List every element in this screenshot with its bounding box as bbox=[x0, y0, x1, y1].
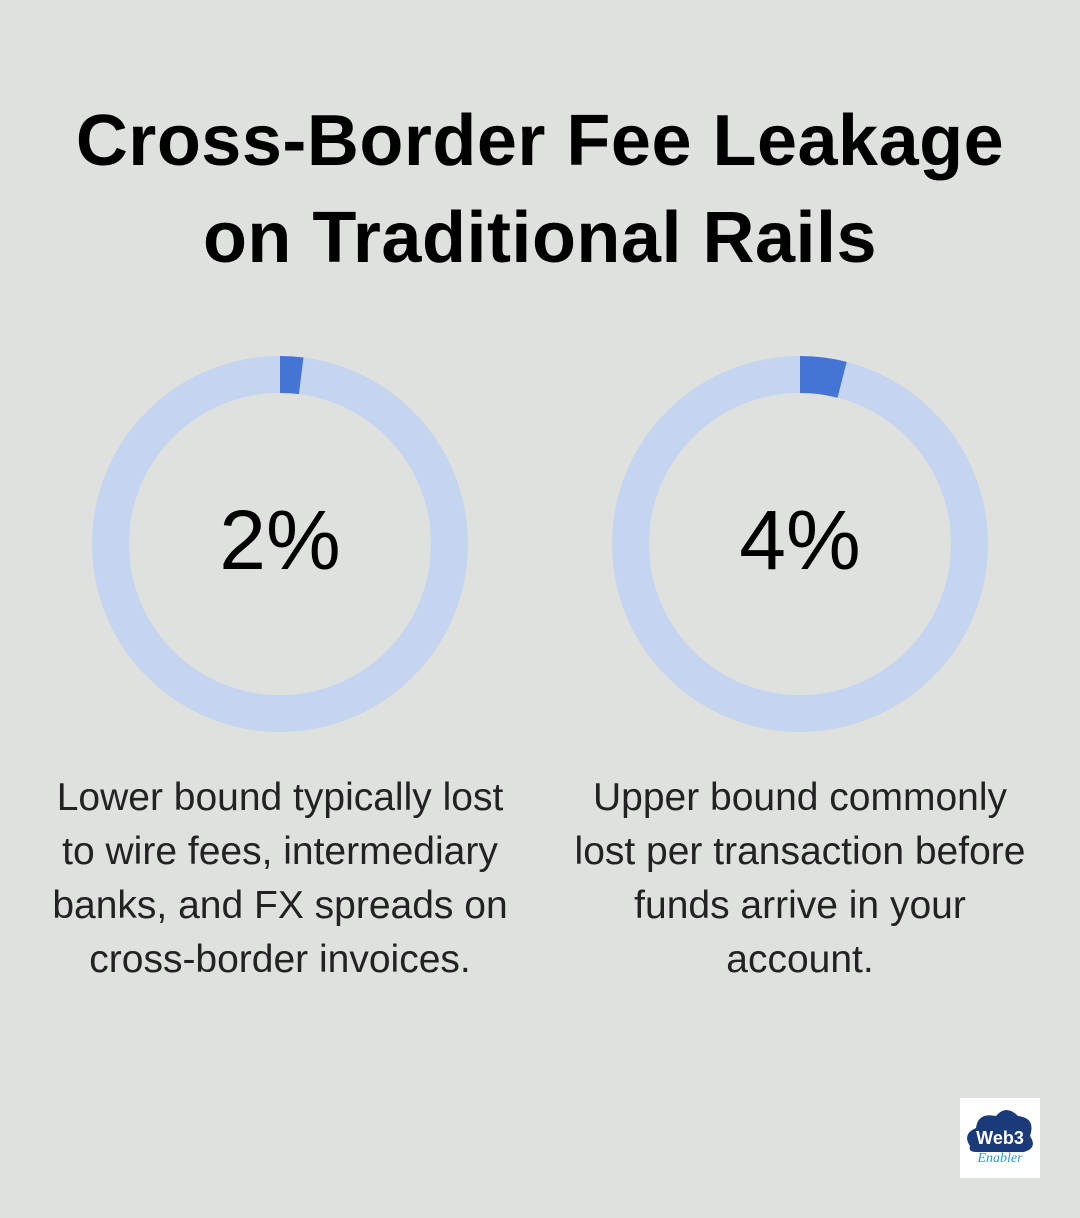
donut chart: 2% bbox=[92, 356, 468, 732]
text: upper bound bbox=[575, 776, 1025, 981]
text: lower bound: to wire fees, intermediary bbox=[62, 830, 498, 873]
donut chart: 4% bbox=[612, 356, 988, 732]
stat: 4%: 4% bbox=[739, 493, 861, 587]
title bbox=[76, 101, 1004, 278]
logo: Web3 bbox=[960, 1098, 1040, 1178]
text: lower bound bbox=[52, 776, 508, 981]
text: lower bound: Lower bound typically lost bbox=[57, 776, 503, 819]
logo: Web3: Web3 bbox=[976, 1128, 1024, 1148]
logo: Web3: Enabler bbox=[976, 1151, 1023, 1166]
title: Cross-Border Fee Leakage bbox=[76, 101, 1004, 181]
stat: 2%: 2% bbox=[219, 493, 341, 587]
text: lower bound: cross-border invoices. bbox=[89, 938, 471, 981]
text: upper bound: account. bbox=[726, 938, 874, 981]
text: upper bound: Upper bound commonly bbox=[593, 776, 1007, 819]
text: lower bound: banks, and FX spreads on bbox=[52, 884, 508, 927]
text: upper bound: lost per transaction before bbox=[575, 830, 1025, 873]
text: upper bound: funds arrive in your bbox=[634, 884, 966, 927]
title: on Traditional Rails bbox=[203, 198, 877, 278]
